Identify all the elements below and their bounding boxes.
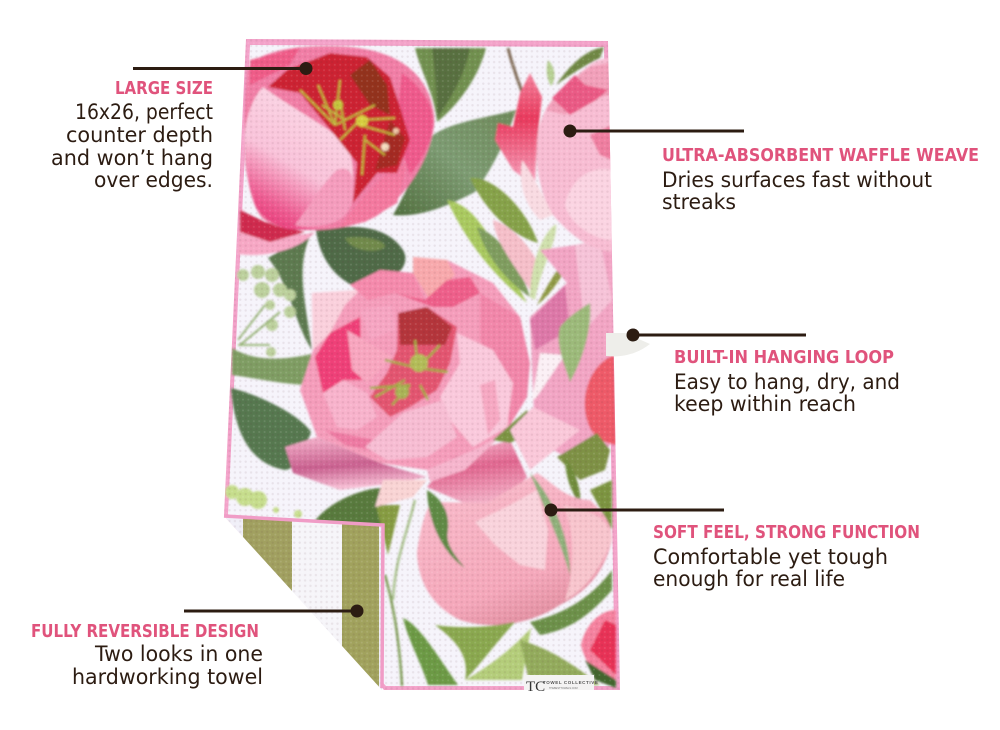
callout: soft feel, strong function: SOFT FEEL, STRONG FUNCTION [653, 523, 920, 543]
leaf: left small [268, 232, 312, 350]
leaf: right of bud [557, 433, 610, 480]
leaf: small behind petal [492, 409, 529, 444]
towel label: THEBESTTOWELS.COM [549, 687, 578, 690]
peony: centre red heart [370, 307, 457, 417]
towel border [224, 39, 620, 690]
callout: large size: LARGE SIZE [115, 79, 213, 99]
callout: built-in hanging loop: keep within reach [674, 392, 856, 417]
leaf: left dark [231, 388, 311, 470]
leaf: dark lower [316, 227, 405, 290]
callout: soft feel, strong function: Comfortable yet tough [653, 545, 888, 570]
folded corner [224, 515, 384, 695]
callout: large size: counter depth [66, 123, 213, 148]
towel print [220, 35, 625, 695]
stem [508, 48, 523, 95]
towel [220, 35, 650, 695]
callout: built-in hanging loop [626, 328, 900, 417]
white stripe [292, 520, 342, 690]
callout: fully reversible design: Two looks in one [94, 642, 263, 667]
petal: centre lower right [427, 440, 527, 510]
olive stripe right [342, 520, 379, 690]
hanging loop [606, 333, 650, 356]
callout: ultra-absorbent waffle weave [564, 124, 979, 215]
callout: soft feel, strong function [544, 504, 920, 592]
peony: centre outer [300, 257, 530, 470]
leaves: right cluster [470, 178, 538, 243]
leaf: right small [559, 303, 590, 382]
peony: top left [244, 46, 434, 230]
towel label: TC [526, 679, 545, 695]
flowers: bottom left [225, 485, 302, 518]
leaves: bottom [403, 618, 458, 685]
stamens: top left [300, 80, 395, 175]
callout: built-in hanging loop: Easy to hang, dry, and [674, 370, 900, 395]
towel label: TOWEL COLLECTIVE [543, 680, 598, 685]
callout: fully reversible design [31, 604, 364, 690]
callout: large size [51, 62, 312, 193]
callout: built-in hanging loop: BUILT-IN HANGING LOOP [674, 348, 894, 368]
gypsophila sprig [237, 265, 296, 357]
pink background bloom [530, 240, 614, 470]
bud: bottom [417, 473, 612, 625]
peony: top left under petals [238, 208, 315, 255]
waffle weave texture [220, 35, 625, 695]
leaf: large diagonal [393, 110, 516, 215]
callout: soft feel, strong function: enough for real life [653, 567, 845, 592]
leaf: top centre [415, 48, 486, 122]
callout: ultra-absorbent waffle weave: streaks [662, 190, 736, 215]
bud: bottom right [581, 610, 616, 684]
callout: large size: over edges. [94, 168, 213, 193]
callout: fully reversible design: FULLY REVERSIBLE DESIGN [31, 622, 259, 642]
callout: ultra-absorbent waffle weave: Dries surfaces fast without [662, 168, 932, 193]
stamens: centre [370, 340, 448, 405]
olive stripe left [243, 518, 292, 591]
petal: centre front [365, 400, 457, 460]
peony: right [537, 58, 612, 252]
right red bloom [585, 355, 616, 445]
petal: centre lower left [285, 437, 427, 490]
leaf: behind bud [314, 486, 382, 524]
towel label [524, 675, 598, 695]
callout: fully reversible design: hardworking towel [72, 665, 263, 690]
callout: large size: 16x26, perfect [75, 100, 213, 125]
leaves: top right [547, 60, 554, 86]
leaf: left middle [232, 348, 312, 385]
callout: large size: and won’t hang [51, 146, 213, 171]
